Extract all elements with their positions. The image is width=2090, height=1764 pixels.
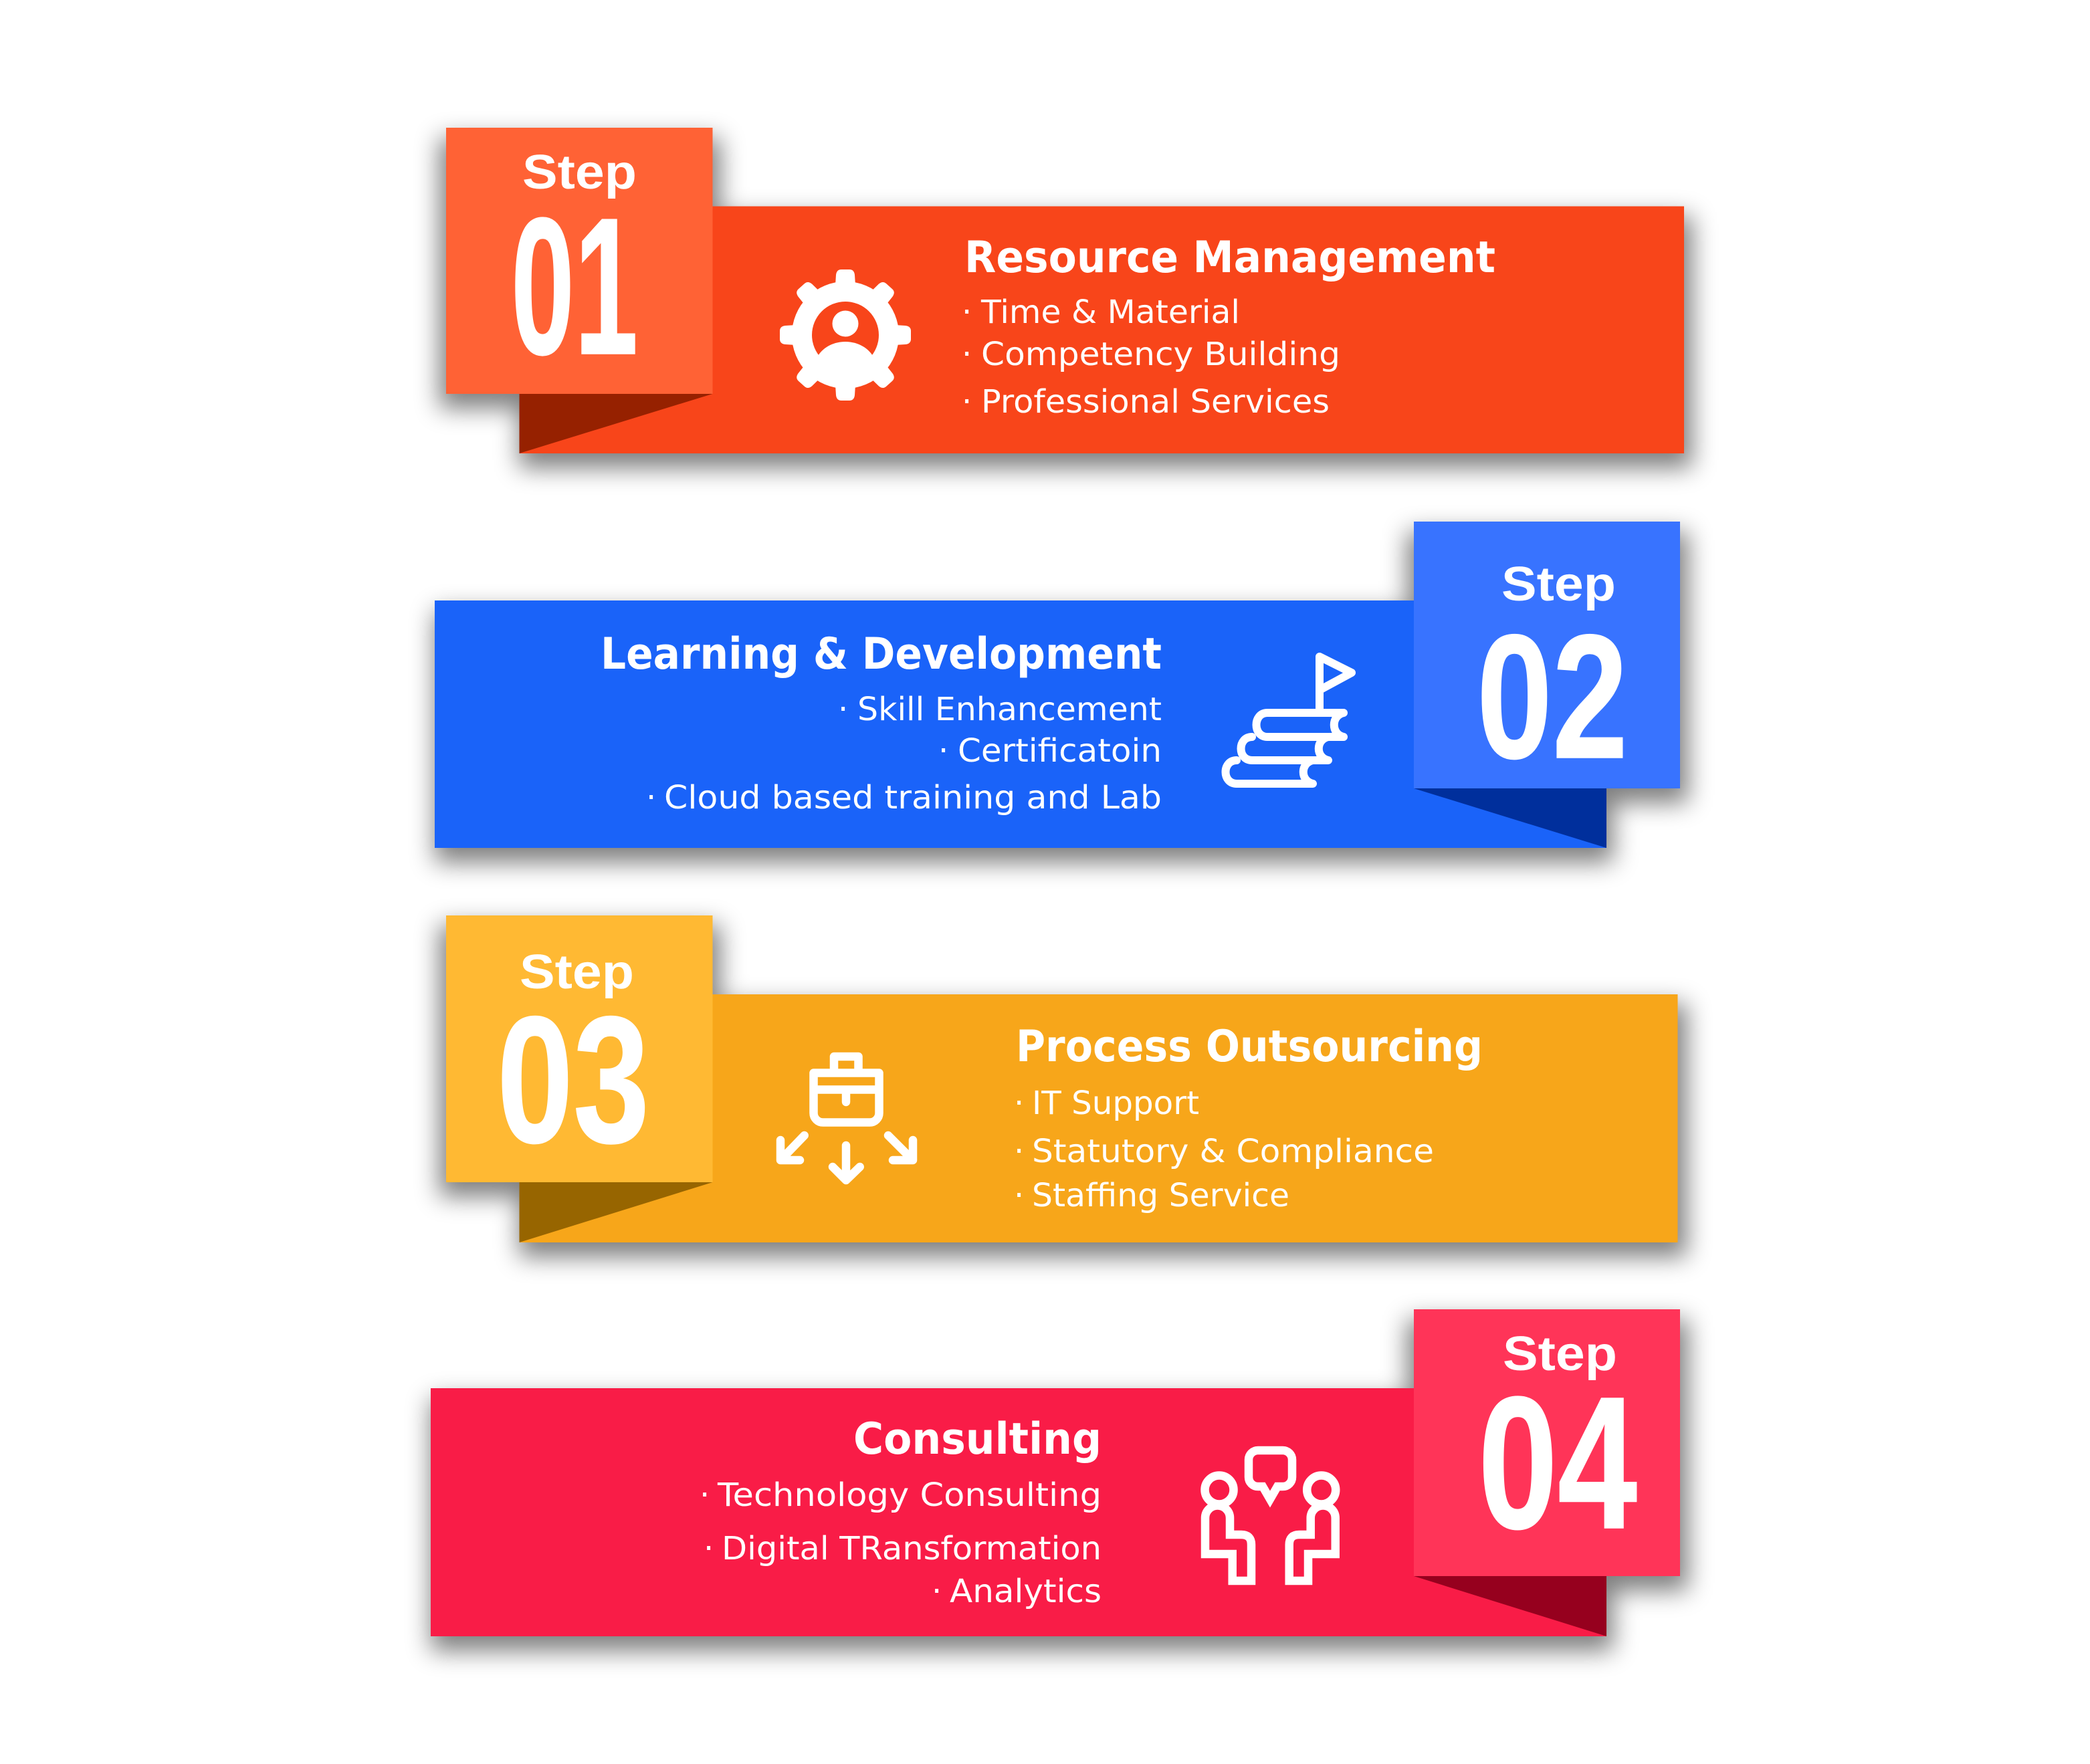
list 02: Certificatoin <box>958 732 1162 770</box>
list 01: · <box>962 383 972 421</box>
step box 02: 02 <box>1477 598 1628 795</box>
list 03: IT Support <box>1032 1085 1199 1122</box>
step box 04 <box>1414 1309 1680 1576</box>
fold 01 <box>519 394 713 453</box>
panel: step 01 resource management <box>439 128 1692 468</box>
list 01: · <box>962 336 972 373</box>
list 02: · <box>838 691 848 728</box>
heading 04: Consulting <box>853 1414 1102 1464</box>
icon: stacked books with flag <box>1225 657 1352 784</box>
list 04: Analytics <box>950 1573 1102 1610</box>
list 02: Skill Enhancement <box>857 691 1162 728</box>
step box 03: Step <box>520 946 634 999</box>
list 02 <box>646 691 1162 816</box>
list 01 <box>962 294 1340 421</box>
list 03: Statutory & Compliance <box>1032 1133 1434 1170</box>
ribbon band 02 <box>435 600 1606 848</box>
list 01: Competency Building <box>981 336 1340 373</box>
list 02: · <box>646 779 656 816</box>
list 02: · <box>938 732 948 770</box>
list 01: Time & Material <box>980 294 1240 331</box>
fold 04 <box>1414 1576 1606 1636</box>
list 03: · <box>1014 1177 1024 1214</box>
step box 01: Step <box>522 146 637 199</box>
list 03: · <box>1014 1133 1024 1170</box>
step box 04: 04 <box>1478 1357 1638 1568</box>
list 04: Digital TRansformation <box>722 1530 1102 1567</box>
icon: briefcase with three arrows <box>780 1057 913 1180</box>
heading 03: Process Outsourcing <box>1016 1022 1483 1072</box>
list 04: · <box>932 1573 942 1610</box>
list 03: · <box>1014 1085 1024 1122</box>
list 04: Technology Consulting <box>717 1476 1102 1514</box>
step box 03 <box>446 915 713 1182</box>
list 04 <box>700 1476 1102 1610</box>
ribbon band 03 <box>519 994 1677 1242</box>
fold 02 <box>1414 788 1606 848</box>
list 04: · <box>704 1530 714 1567</box>
icon: gear with person <box>780 269 911 401</box>
step box 04: Step <box>1503 1327 1617 1381</box>
heading 01: Resource Management <box>964 233 1495 283</box>
ribbon band 01 <box>519 206 1684 453</box>
panel: step 02 learning and development <box>435 522 1688 863</box>
list 02: Cloud based training and Lab <box>664 779 1162 816</box>
icon: two people with speech bubble <box>1205 1450 1336 1581</box>
step box 01 <box>446 128 713 395</box>
step box 03: 03 <box>497 980 649 1181</box>
panel: step 03 process outsourcing <box>439 915 1687 1257</box>
ribbon band 04 <box>431 1388 1606 1636</box>
step box 02: Step <box>1501 558 1616 611</box>
list 01: · <box>962 294 972 331</box>
panel: step 04 consulting <box>431 1309 1688 1651</box>
list 01: Professional Services <box>981 383 1330 421</box>
list 03: Staffing Service <box>1032 1177 1289 1214</box>
heading 02: Learning & Development <box>601 629 1162 679</box>
step box 02 <box>1414 522 1680 795</box>
list 04: · <box>700 1476 710 1514</box>
step box 01: 01 <box>511 177 638 395</box>
list 03 <box>1014 1085 1434 1214</box>
fold 03 <box>519 1182 713 1242</box>
